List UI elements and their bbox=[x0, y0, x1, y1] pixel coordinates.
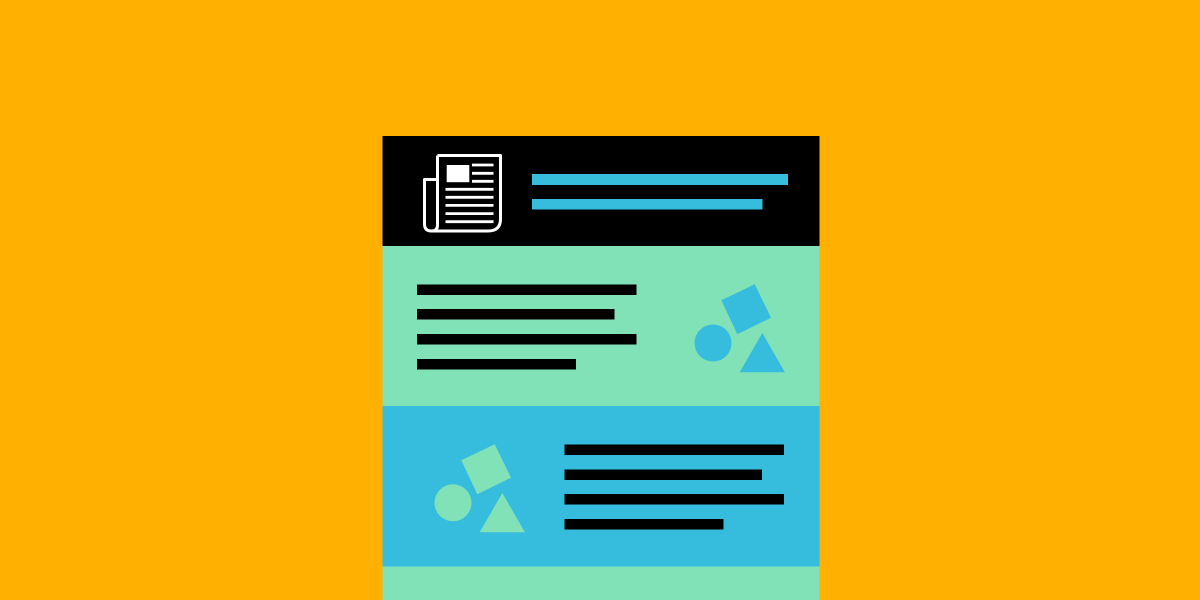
panel: black header bbox=[382, 136, 820, 246]
headline bars bbox=[532, 174, 788, 210]
text bars bbox=[564, 444, 784, 530]
icon: green shapes bbox=[434, 444, 525, 532]
icon: blue shapes bbox=[694, 284, 785, 372]
icon: newspaper bbox=[424, 156, 500, 231]
panel: blue content row bbox=[382, 406, 820, 566]
text bars bbox=[417, 284, 636, 370]
panel: green footer strip bbox=[382, 566, 820, 600]
panel: green content row bbox=[382, 246, 820, 406]
